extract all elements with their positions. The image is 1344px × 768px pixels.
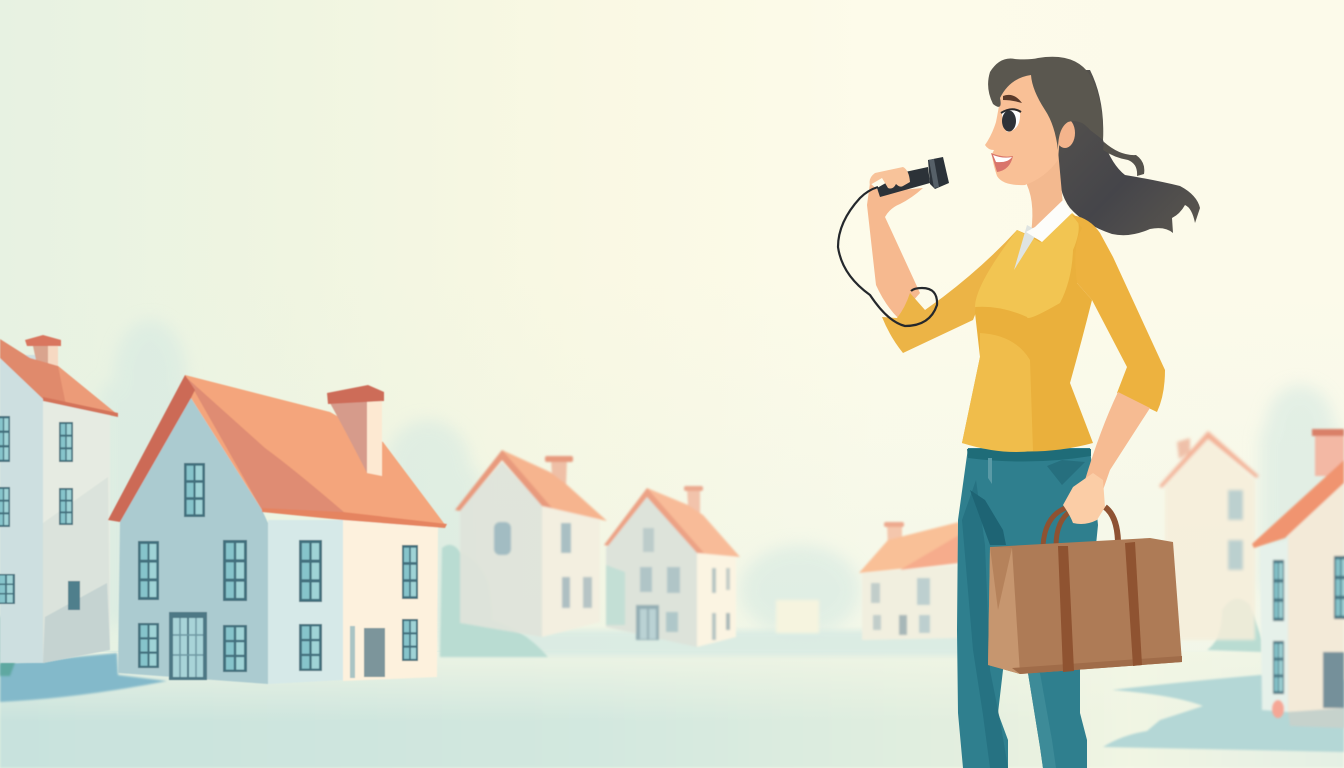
centre house roof (502, 450, 607, 521)
right house windows (1273, 560, 1284, 621)
main house roof (185, 375, 446, 526)
left house roof (0, 339, 118, 415)
left house side wall (43, 398, 110, 663)
house: centre right (604, 486, 740, 647)
hand (1063, 473, 1105, 524)
distant trees (100, 320, 1344, 640)
bag handle back (1043, 506, 1072, 546)
neck (1027, 150, 1063, 240)
centre house windows (494, 522, 511, 555)
centre right house windows (643, 528, 654, 552)
raised forearm and palm (867, 183, 923, 318)
bushes behind houses (0, 545, 1262, 676)
right house walls (1260, 540, 1288, 712)
right house roof (1252, 460, 1344, 548)
trousers (957, 448, 1098, 768)
right house chimney (1315, 432, 1344, 476)
far house windows (871, 583, 880, 603)
shadow: left blue ground shadow (0, 653, 167, 702)
sweater torso (962, 213, 1100, 452)
bag (988, 538, 1182, 674)
house: right edge (1252, 429, 1344, 728)
main house cream wall (343, 520, 438, 681)
centre right house chimney (687, 488, 700, 515)
far house chimney (887, 524, 902, 548)
house: right distant (1159, 431, 1259, 640)
ground (0, 630, 1344, 768)
face (985, 60, 1062, 185)
main house windows (184, 463, 205, 517)
fingers (870, 167, 910, 188)
house: main foreground (108, 375, 447, 684)
house: far left (0, 335, 118, 663)
main house double door (169, 612, 207, 680)
house: centre (455, 450, 607, 637)
bag straps (1058, 546, 1074, 672)
blouse collar (1014, 200, 1072, 270)
main house white wall (268, 520, 343, 684)
left house front wall (0, 355, 43, 663)
haze near horizon (0, 280, 1344, 660)
hair back (1040, 70, 1200, 235)
lower arm (1085, 392, 1150, 490)
sweater sleeve: raised arm (882, 230, 1017, 353)
main house chimney (330, 399, 367, 473)
sweater sleeve: lower arm (1072, 215, 1165, 412)
house: faint small distance (776, 600, 819, 633)
mist band at the foot of the houses (440, 630, 1000, 656)
eyebrow (1003, 95, 1022, 103)
main house gable wall (118, 398, 268, 684)
left house chimney (33, 346, 48, 366)
house: behind woman (859, 522, 960, 640)
ear (1055, 118, 1075, 148)
centre right house roof (647, 488, 740, 557)
hair wisp (1103, 142, 1144, 176)
microphone (877, 157, 949, 197)
microphone cable (838, 187, 937, 326)
left house windows (0, 416, 10, 462)
far house roof (859, 522, 959, 573)
centre house chimney (551, 459, 567, 486)
main house side door (364, 628, 385, 677)
right house door (1323, 652, 1344, 708)
eye (1001, 109, 1021, 132)
woman (838, 57, 1200, 768)
puddle: right shadow (1103, 675, 1344, 752)
hair front (988, 57, 1103, 150)
mouth (991, 153, 1013, 172)
